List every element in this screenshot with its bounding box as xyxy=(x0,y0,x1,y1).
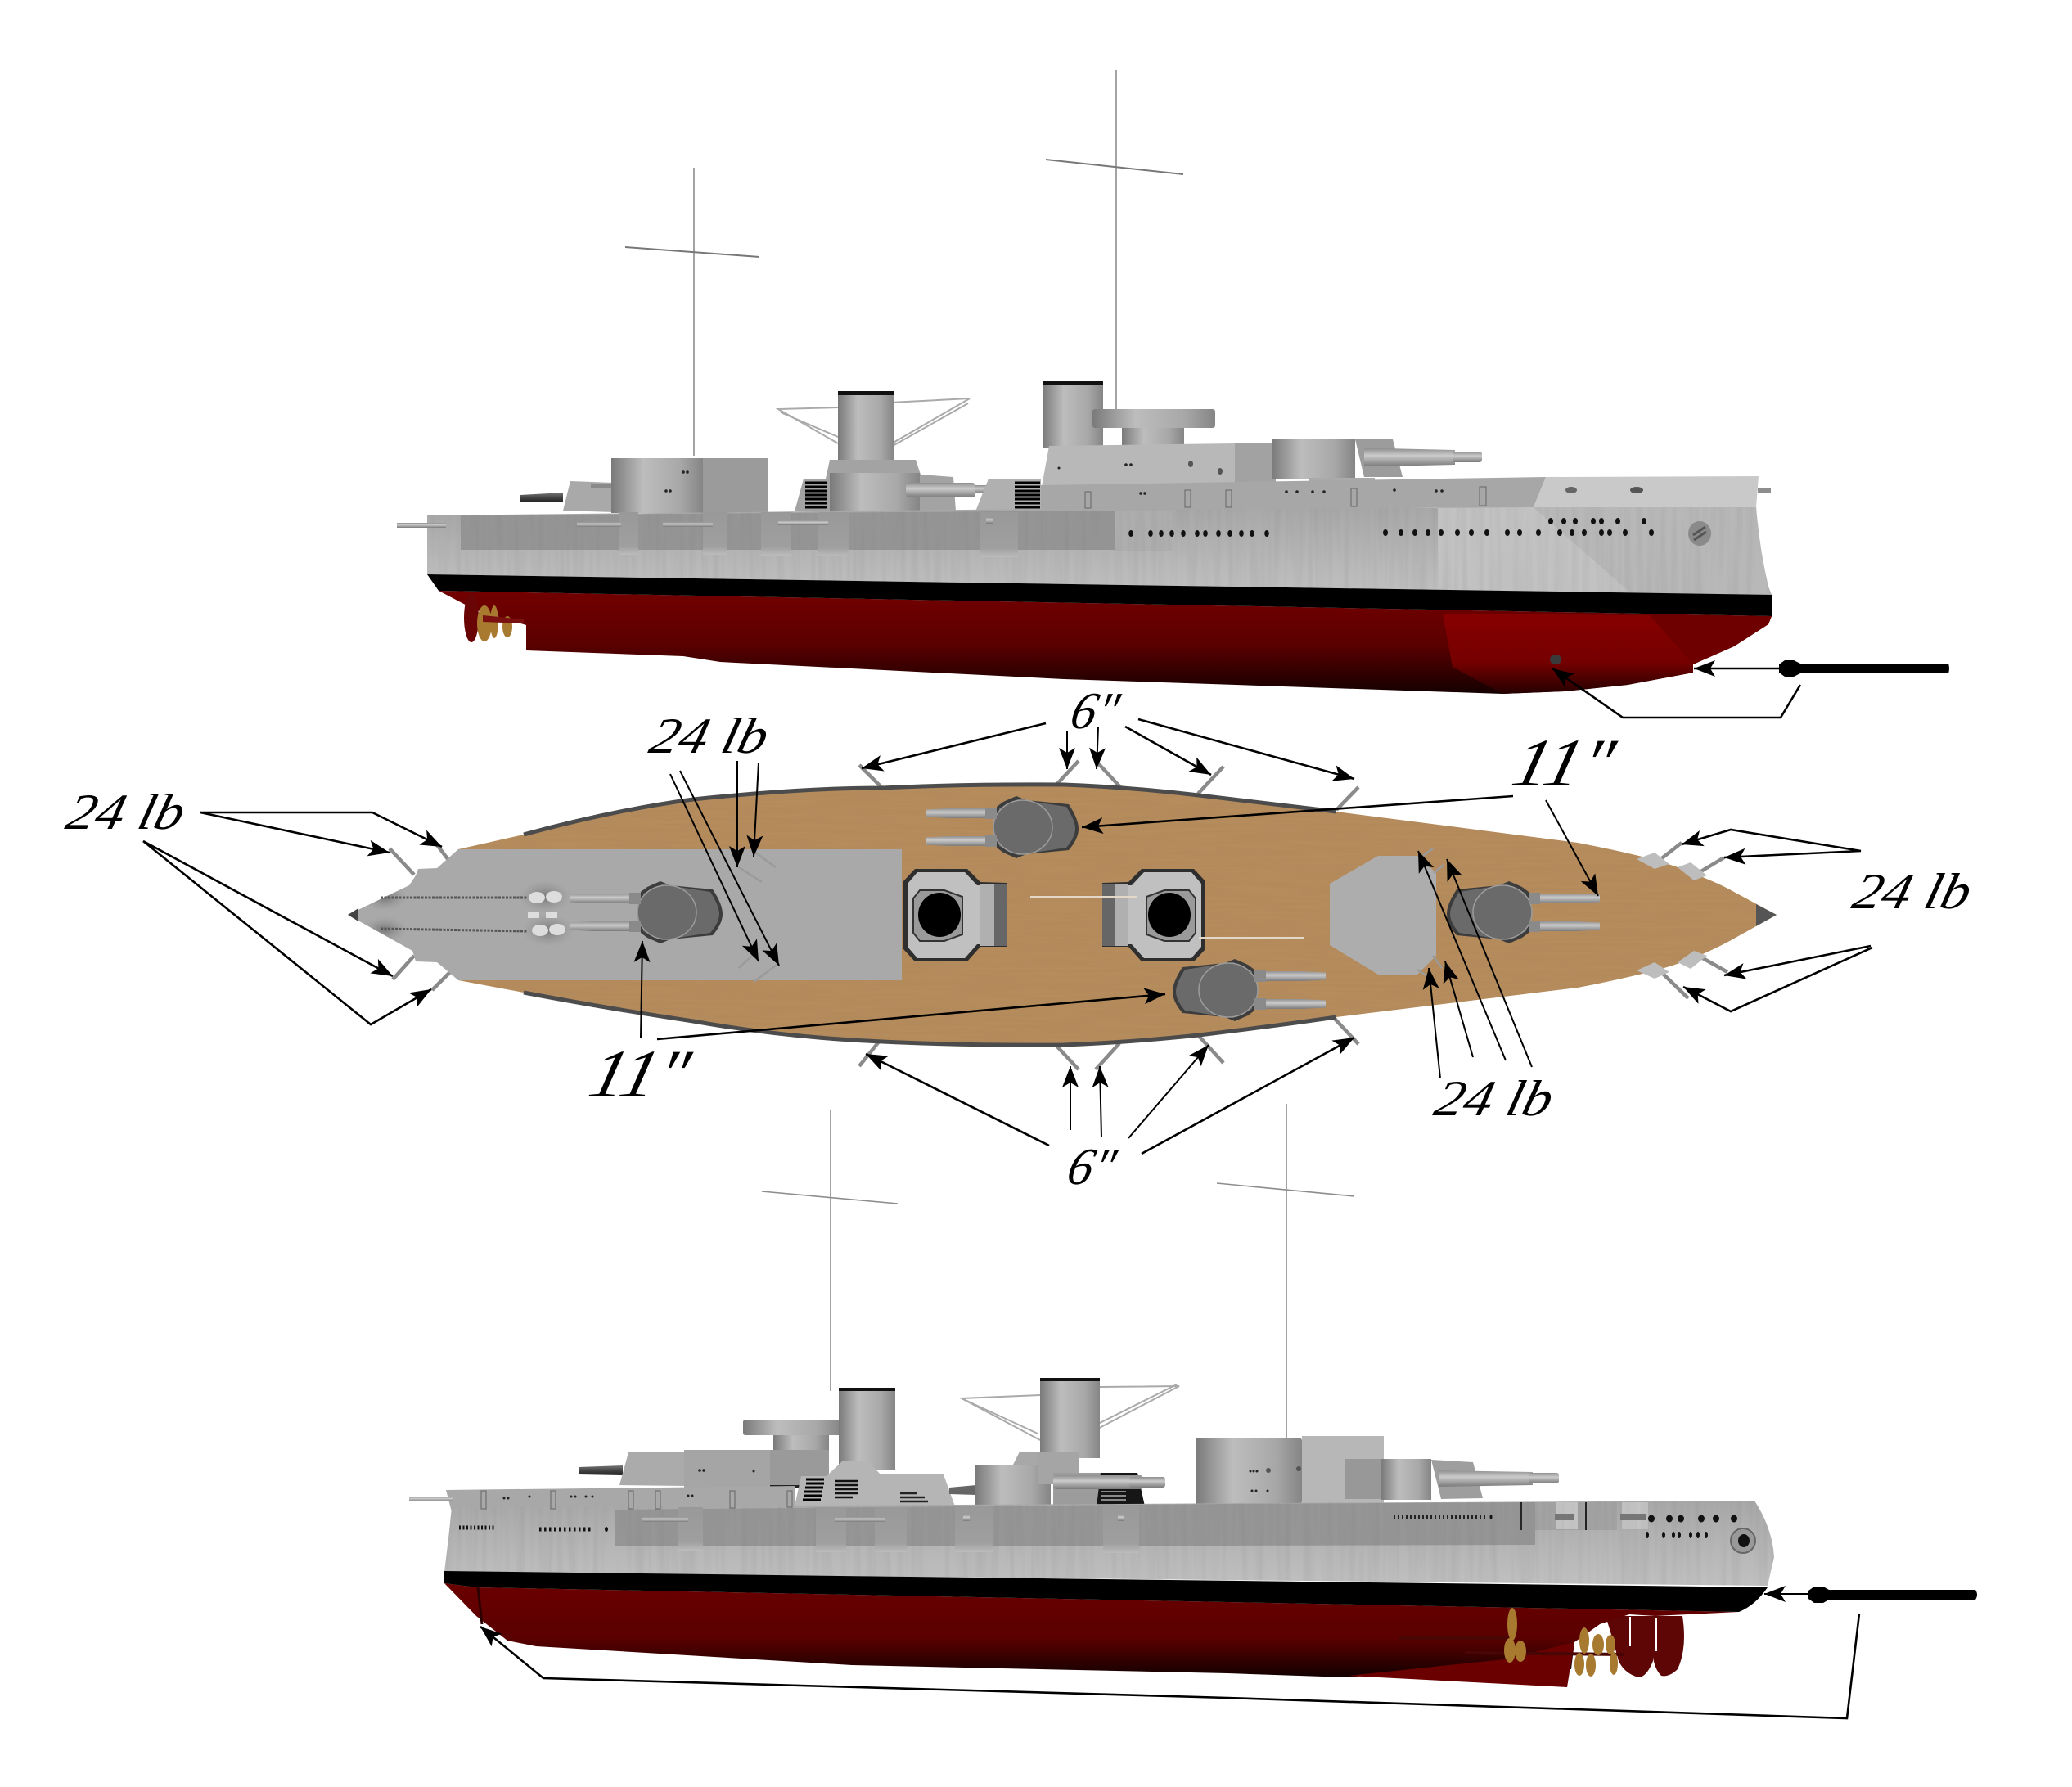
torpedo tube hole xyxy=(1550,655,1561,664)
midship turret xyxy=(975,1452,1165,1506)
derrick struts xyxy=(962,1384,1179,1440)
hull side xyxy=(427,507,1772,595)
label: 24 lb left: 24 lb xyxy=(61,784,191,840)
24 lb gun stubs xyxy=(390,843,1727,998)
label: 6 inch top: 6" xyxy=(1065,682,1126,740)
funnel: aft xyxy=(1040,1378,1100,1458)
forward superstructure xyxy=(1041,443,1276,491)
forward vents xyxy=(975,479,1041,511)
mast: fore xyxy=(762,1110,898,1391)
rudder skeg xyxy=(1348,1642,1574,1687)
midship structure with vents xyxy=(795,1461,955,1506)
arrows: 24 lb right xyxy=(1682,830,1872,1011)
stern fittings xyxy=(348,885,566,943)
forward grey deck octagon xyxy=(1330,856,1436,975)
hull side xyxy=(444,1501,1774,1586)
funnel platform: fore xyxy=(1102,869,1205,961)
torpedo icon xyxy=(1808,1587,1977,1603)
turret: aft 11 inch xyxy=(570,881,723,943)
midship superstructure xyxy=(795,460,956,511)
6 inch gun stubs xyxy=(859,761,1358,1069)
midship dark gun xyxy=(949,1485,976,1495)
bow patches xyxy=(1637,853,1707,979)
arrow: torpedo to forefoot xyxy=(480,1614,1859,1718)
funnel platform: aft xyxy=(903,869,1007,961)
casemate guns xyxy=(409,1497,1124,1522)
bridge platform xyxy=(743,1420,841,1451)
turret: wing port 11 inch xyxy=(926,796,1079,858)
upper deck side xyxy=(1041,476,1771,511)
arrows: 24 lb centre xyxy=(670,761,779,966)
label: 11 inch lower left: 11" xyxy=(582,1037,698,1112)
red lower hull xyxy=(444,1583,1739,1677)
rudders xyxy=(1606,1616,1684,1677)
forecastle window details xyxy=(481,1491,792,1509)
stern grey deck xyxy=(348,849,902,980)
derrick struts xyxy=(778,398,970,450)
propellers and rudder xyxy=(464,593,524,642)
aft turret xyxy=(1345,1459,1559,1500)
arrows: 6 inch top xyxy=(862,719,1354,779)
thin inner gun stubs xyxy=(739,848,1444,982)
midship turret guns xyxy=(906,483,1005,497)
torpedo icon xyxy=(1779,660,1949,677)
label: 6 inch lower: 6" xyxy=(1061,1138,1123,1196)
arrows: 11 inch lower left xyxy=(641,941,1165,1039)
propellers xyxy=(1504,1608,1618,1677)
arrows: 6 inch lower xyxy=(866,1038,1354,1154)
callouts and arrows: plan view xyxy=(61,682,1978,1196)
red bow panel xyxy=(1443,614,1772,694)
mast: aft xyxy=(1217,1104,1354,1440)
forward superstructure xyxy=(684,1450,829,1488)
arrow: torpedo to stem xyxy=(1694,668,1779,669)
label: 24 lb lower: 24 lb xyxy=(1430,1070,1560,1127)
forward turret xyxy=(1272,439,1482,481)
red lower hull xyxy=(439,591,1772,694)
arrows: 24 lb left xyxy=(143,812,442,1024)
hawse pipe xyxy=(1731,1528,1755,1553)
stem line xyxy=(476,1573,482,1624)
aft superstructure xyxy=(1196,1436,1384,1505)
forecastle deck side xyxy=(446,1486,795,1512)
mast: aft xyxy=(625,168,759,456)
fine porthole rows xyxy=(459,1515,1493,1532)
deck side edges xyxy=(524,785,1336,1045)
bow tip xyxy=(1756,904,1777,926)
plan view: deck xyxy=(348,761,1777,1069)
aft superstructure xyxy=(611,458,768,513)
funnel: fore xyxy=(839,1388,895,1470)
hawse pipe xyxy=(1688,521,1711,546)
rudder slits xyxy=(1629,1617,1657,1651)
arrows: 11 inch top right xyxy=(1082,796,1598,896)
deck outline xyxy=(458,785,1777,1045)
label: 11 inch top right: 11" xyxy=(1505,726,1623,801)
arrows: 24 lb lower xyxy=(1418,851,1532,1078)
side view: lower ship xyxy=(409,1104,1977,1718)
turret: wing starboard 11 inch xyxy=(1173,959,1326,1021)
turret: forward 11 inch xyxy=(1447,881,1600,943)
funnel: aft xyxy=(838,391,894,461)
mast: fore xyxy=(1046,70,1183,409)
portholes: side row xyxy=(1128,518,1654,537)
arrow: torpedo to stem xyxy=(1764,1593,1808,1595)
label: 24 lb right: 24 lb xyxy=(1848,863,1978,920)
shafts xyxy=(1399,1638,1624,1654)
forward turret xyxy=(579,1452,684,1486)
thin deck lines xyxy=(1030,897,1304,938)
portholes xyxy=(1646,1515,1737,1538)
bridge platform xyxy=(1092,409,1215,446)
label: 24 lb centre: 24 lb xyxy=(645,708,775,764)
side view: upper ship xyxy=(397,70,1949,718)
black boot topping xyxy=(427,574,1772,616)
funnel: fore xyxy=(1043,381,1103,448)
casemate pillars xyxy=(678,1506,1139,1553)
casemate guns xyxy=(397,517,993,528)
aft turret xyxy=(520,481,614,512)
casemate pillars xyxy=(619,512,1018,557)
arrow: torpedo to side tube xyxy=(1552,668,1800,718)
black boot topping xyxy=(444,1571,1768,1612)
